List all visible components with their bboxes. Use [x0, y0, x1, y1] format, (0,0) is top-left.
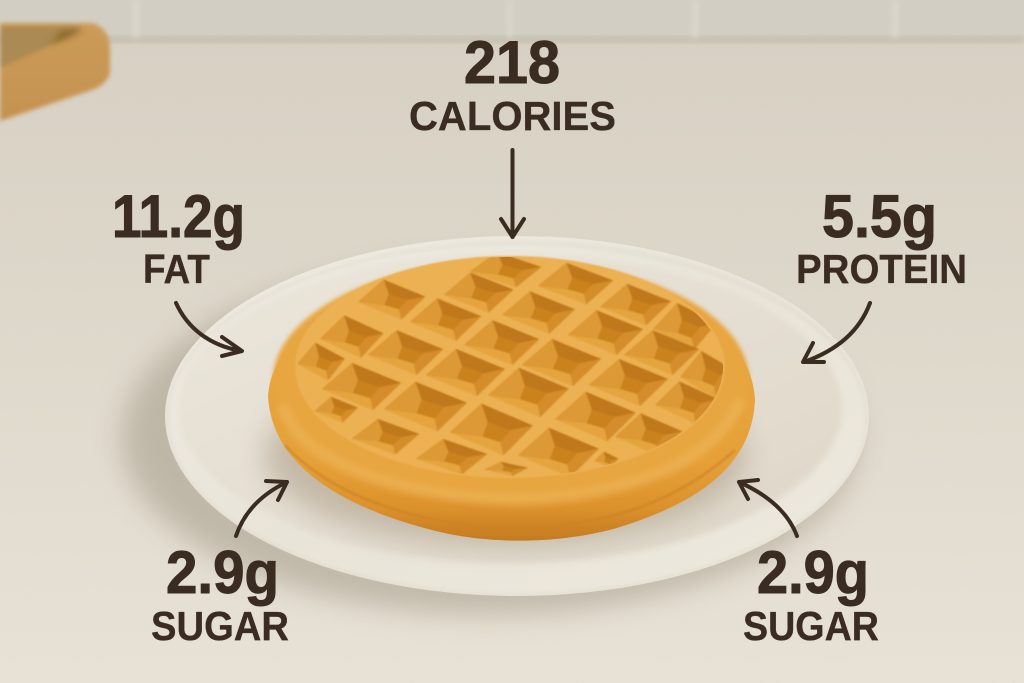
value: sugar right: 2.9g: [757, 539, 869, 606]
arrow: sugar left: [236, 481, 287, 536]
arrow: calories: [501, 150, 524, 237]
value: 218: 218: [464, 29, 560, 96]
label: protein: PROTEIN: [796, 246, 967, 292]
waffle: [268, 252, 755, 541]
arrow: protein: [803, 303, 870, 362]
plate: [122, 236, 869, 614]
waffle grid: [297, 252, 736, 477]
label: sugar right: SUGAR: [743, 603, 879, 649]
label: fat: FAT: [143, 246, 210, 292]
waffle contact shadow: [265, 365, 745, 545]
waffle body: [268, 261, 755, 541]
arrow: fat: [176, 303, 242, 356]
wooden tray: [0, 23, 110, 121]
callout: fat: [112, 183, 245, 356]
plate shadow: [122, 262, 858, 614]
callout: protein: [796, 183, 967, 362]
callout: sugar right: [739, 480, 879, 649]
value: protein: 5.5g: [822, 183, 937, 250]
label: calories: CALORIES: [409, 93, 616, 139]
value: sugar left: 2.9g: [166, 539, 279, 606]
value: fat: 11.2g: [112, 183, 245, 250]
label: sugar left: SUGAR: [151, 603, 289, 649]
arrow: sugar right: [739, 480, 797, 536]
callout: calories: [409, 29, 616, 237]
callout: sugar left: [151, 481, 289, 649]
